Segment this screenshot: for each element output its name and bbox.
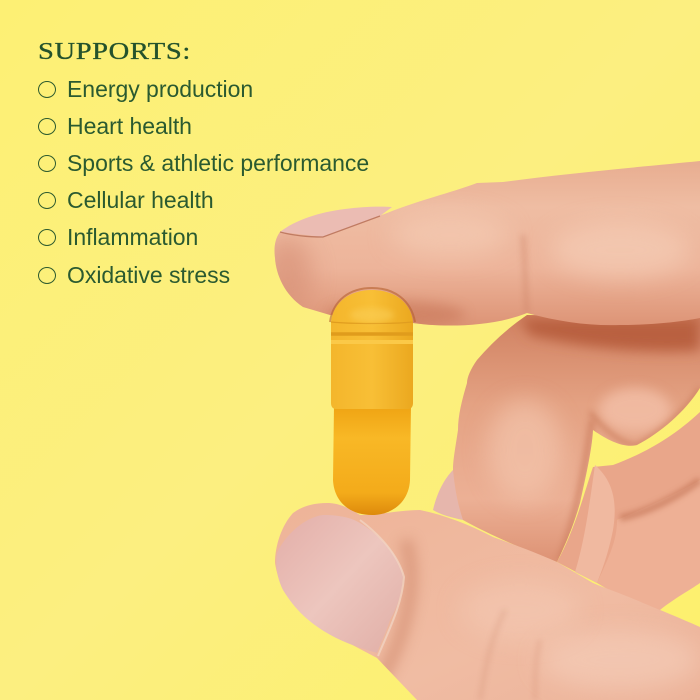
- capsule shadow on index finger: [330, 288, 415, 322]
- index finger: [274, 161, 700, 326]
- capsule bands: [331, 322, 413, 324]
- list item: inflammation: Inflammation: [67, 224, 198, 250]
- back fingers: [433, 310, 700, 610]
- list item: energy production: Energy production: [67, 76, 253, 102]
- list item: oxidative stress: Oxidative stress: [67, 262, 230, 288]
- list item: sports and athletic performance: Sports & athletic performance: [67, 150, 369, 176]
- little finger: [597, 480, 700, 610]
- capsule body upper: [331, 290, 413, 409]
- fingertip shading: [274, 234, 316, 306]
- ring finger: [557, 412, 700, 583]
- index fingernail: [280, 207, 392, 237]
- list item: cellular health: Cellular health: [67, 187, 214, 213]
- middle finger: [453, 315, 700, 562]
- photo: hand holding capsule on yellow background: [274, 161, 700, 700]
- fingernail of middle finger: [433, 470, 463, 520]
- nail bed shade: [380, 540, 411, 680]
- thumbnail: [276, 515, 403, 653]
- thumb: [260, 490, 700, 700]
- capsule body lower: [333, 405, 411, 515]
- heading: SUPPORTS:: [38, 39, 191, 65]
- highlight pads: [401, 220, 500, 256]
- knuckle crease: [523, 235, 527, 313]
- list item: heart health: Heart health: [67, 113, 192, 139]
- capsule: [330, 288, 415, 515]
